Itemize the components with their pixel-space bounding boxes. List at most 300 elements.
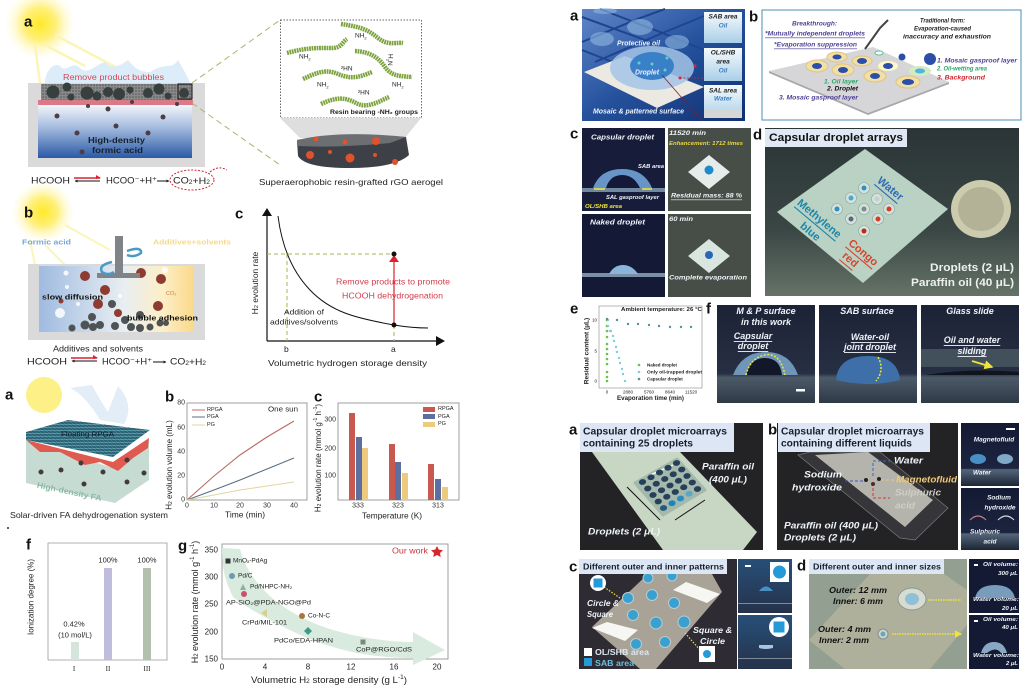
background	[580, 423, 763, 550]
amine labels: NH	[355, 32, 364, 40]
bars: PGA	[356, 437, 441, 500]
vapour plumes	[70, 385, 128, 424]
red particles	[58, 268, 166, 317]
floating RPGA top	[26, 420, 150, 457]
caption: aerogel: Superaerophobic resin-grafted rGO aerogel	[259, 177, 443, 187]
legend: PG	[438, 421, 446, 427]
title box	[580, 423, 734, 452]
label a: a	[569, 422, 578, 438]
tick labels: 60	[177, 424, 185, 432]
left legend: 2. Droplet	[826, 86, 859, 92]
series: only oil-trapped droplet	[607, 319, 626, 382]
amine labels: 2	[364, 35, 367, 40]
subpanel: magnetofluid and water	[961, 423, 1019, 486]
axis titles: -1	[190, 543, 196, 549]
subpanel: capsular droplet side view: OL/SHB area	[585, 204, 622, 210]
icon: sun	[26, 377, 62, 413]
catalyst particles	[54, 100, 179, 154]
amine labels: 2	[326, 84, 329, 89]
icon: pipette	[865, 20, 888, 49]
legend: PGA	[438, 414, 450, 420]
tick labels: 40	[177, 448, 185, 456]
tick labels: 323	[392, 502, 404, 510]
legend	[584, 647, 649, 668]
inset: resin bearing NH2 groups	[280, 20, 422, 118]
subpanel: residual mass: Enhancement: 1712 times	[669, 141, 743, 147]
axis labels: 2	[254, 305, 260, 308]
subpanel: 40 uL oil: 40 μL	[1001, 625, 1018, 631]
amine labels: NH	[299, 54, 308, 60]
subpanel: magnetofluid and water: Magnetofluid	[974, 436, 1015, 444]
subpanel: complete evaporation	[668, 214, 751, 297]
axis titles: evolution rate (mmol g	[314, 422, 322, 504]
legend: PGA	[207, 414, 219, 420]
text: sizes: Inner: 6 mm	[833, 596, 883, 606]
axis titles: 2	[317, 503, 323, 506]
catalyst particles	[38, 458, 146, 486]
tick labels: 0	[220, 662, 225, 672]
bar chart: H2 evolution rate vs temperature	[313, 388, 459, 520]
left legend	[779, 78, 859, 102]
equation b: HCOO⁻+H⁺	[102, 356, 152, 368]
tick labels: 300	[205, 572, 219, 582]
text: additives+solvents: Additives+solvents	[153, 238, 231, 246]
text: volumes: Droplets (2 μL)	[930, 262, 1014, 274]
text: pattern labels	[587, 598, 732, 646]
tick labels: 333	[352, 502, 364, 510]
legend: PG	[207, 422, 215, 428]
text: CO2: CO₂	[166, 291, 176, 297]
tick labels: 4	[263, 662, 268, 672]
subpanel: SAB surface: joint droplet	[843, 342, 897, 352]
value labels: 0.42%	[63, 620, 85, 628]
amine labels: 2	[386, 59, 391, 62]
label c: c	[569, 558, 577, 576]
icon: star our work	[431, 546, 443, 557]
axis titles	[164, 420, 265, 520]
axis titles: )	[314, 404, 322, 407]
chart title: Ambient temperature: 26 °C	[621, 307, 702, 313]
axis titles: -1	[190, 556, 196, 562]
series labels: Pd/NHPC-NH₂	[250, 584, 293, 590]
category labels	[73, 665, 151, 673]
tick labels: 8	[306, 662, 311, 672]
data markers	[226, 558, 366, 644]
white bubbles	[44, 267, 168, 318]
subpanel: sodium hydroxide and sulphuric acid	[961, 488, 1019, 550]
title box: Capsular droplet microarrays	[583, 426, 727, 438]
frame	[222, 544, 448, 659]
subpanel: 300 uL oil	[969, 559, 1019, 613]
value labels	[58, 556, 157, 640]
label c: c	[570, 126, 578, 142]
text: our work: Our work	[392, 546, 429, 556]
axis titles: Temperature (K)	[362, 512, 422, 520]
right legend	[936, 58, 1017, 82]
droplets	[832, 182, 894, 236]
dimension lines	[627, 487, 705, 520]
text: sizes: Outer: 12 mm	[829, 585, 887, 595]
inset caption: Resin bearing -NH₂ groups	[330, 110, 419, 116]
series labels: PdCo/EDA-HPAN	[274, 638, 333, 644]
text: volumes	[784, 520, 878, 544]
subpanel: square droplet	[738, 615, 792, 669]
subpanel: residual mass: 11520 min	[669, 131, 706, 137]
title box: Capsular droplet arrays	[769, 132, 903, 144]
red interface	[26, 438, 149, 471]
text: breakthrough: *Mutually independent droplets	[765, 30, 865, 38]
line: PG	[187, 482, 294, 500]
title box	[809, 559, 944, 574]
resin chains	[287, 24, 412, 105]
legend: SAB area	[595, 658, 634, 668]
equation a: HCOOH	[31, 176, 70, 186]
bars: RPGA	[349, 413, 434, 500]
amine labels: NH	[317, 82, 326, 88]
text: pattern labels: Circle	[700, 636, 725, 646]
bars: PG	[362, 448, 448, 500]
text: volumes: Droplets (2 μL)	[784, 532, 856, 544]
tick labels: 80	[177, 400, 185, 406]
text: methylene blue: Methylene	[795, 197, 843, 241]
tick labels: 200	[205, 628, 219, 636]
tile: SAB area: SAB area	[709, 14, 738, 20]
liquid labels: acid	[895, 500, 915, 512]
axis titles: evolution rate (mmol g	[190, 562, 200, 653]
tick labels: 5	[594, 348, 597, 354]
series: capsular droplet	[606, 318, 692, 328]
frame	[762, 10, 1021, 120]
axis labels: evolution rate	[250, 251, 260, 305]
subpanel: magnetofluid and water: Water	[973, 470, 991, 476]
product bubbles	[46, 82, 189, 100]
droplets	[622, 571, 690, 650]
text: volumes	[911, 262, 1014, 289]
equation a: +H	[193, 176, 206, 186]
equation b: +H	[189, 356, 203, 368]
tick labels: 300	[324, 416, 336, 424]
bars	[71, 568, 151, 660]
text: sizes: Outer: 4 mm	[818, 624, 871, 634]
title box: containing 25 droplets	[583, 438, 693, 450]
axis titles	[584, 318, 684, 402]
amine labels: ²HN	[341, 66, 353, 72]
tick labels: 200	[324, 446, 336, 452]
title box	[579, 559, 727, 574]
text: breakthrough	[765, 20, 865, 48]
leader lines	[662, 64, 704, 121]
text: floating RPGA: Floating RPGA	[61, 432, 114, 438]
right legend: 1. Mosaic gasproof layer	[937, 58, 1017, 64]
arrows	[892, 600, 961, 634]
category labels: III	[144, 665, 151, 673]
axis titles: Residual content (μL)	[584, 318, 590, 384]
arrow: remove products	[389, 255, 399, 325]
icon: sun with rays	[4, 0, 125, 83]
curve	[278, 216, 428, 328]
legend: RPGA	[438, 406, 454, 412]
plot frame	[338, 403, 459, 500]
tile grid	[582, 9, 704, 64]
text: one sun: One sun	[268, 404, 298, 414]
series labels: Pd/C	[238, 572, 253, 580]
value labels: 100%	[98, 556, 118, 564]
text: sizes	[818, 585, 887, 645]
equation a	[31, 168, 227, 190]
amine labels: N	[386, 61, 394, 66]
y-axis title: Ionization degree (%)	[26, 559, 36, 635]
glass slide	[798, 452, 948, 540]
caption: Solar-driven FA dehydrogenation system	[10, 510, 168, 520]
equation b: 2	[202, 361, 207, 367]
title box	[778, 423, 930, 452]
category labels: I	[73, 665, 76, 673]
right legend: 2. Oil-wetting area	[936, 66, 987, 72]
axis titles: evolution volume (mL)	[164, 420, 174, 501]
axis titles: -1	[313, 406, 319, 411]
axis titles: Evaporation time (min)	[617, 396, 684, 402]
subpanel: capsular droplet side view: SAL gasproof layer	[606, 195, 660, 201]
vessel	[28, 264, 205, 340]
label b: b	[749, 8, 758, 26]
text: sizes: Inner: 2 mm	[819, 635, 869, 645]
axis titles: Time (min)	[225, 510, 265, 520]
background	[777, 423, 958, 550]
tick labels: 20	[177, 472, 185, 480]
scatter chart: residual content vs evaporation time (right e)	[570, 300, 703, 402]
text: high-density formic acid	[88, 135, 145, 155]
label g: g	[178, 538, 187, 554]
amine labels: 2	[308, 56, 311, 61]
equation b	[27, 355, 207, 368]
reactor vessel	[28, 82, 205, 167]
plot frame	[187, 403, 307, 500]
scatter chart: performance comparison (g)	[178, 538, 448, 685]
text: traditional form	[903, 18, 991, 40]
legend: Only oil-trapped droplet	[647, 370, 703, 374]
tick labels: 20	[433, 662, 442, 672]
icon: sun	[11, 180, 110, 265]
slide	[592, 452, 757, 550]
text: remove product bubbles: Remove product bubbles	[63, 72, 164, 82]
small droplet	[878, 629, 888, 639]
series labels: CoP@RGO/CdS	[356, 646, 413, 654]
label b: b	[768, 422, 777, 438]
text: traditional form: Traditional form:	[920, 18, 965, 24]
series: naked droplet	[606, 319, 608, 382]
panel: microarrays with 25 droplets (lower a)	[569, 422, 763, 550]
axis titles	[313, 404, 422, 520]
text: remove products: Remove products to promote	[336, 278, 451, 286]
tile: SAB area	[704, 12, 742, 43]
subpanel: glass slide: Glass slide	[946, 306, 994, 316]
liquid labels: Magnetofluid	[896, 474, 957, 486]
tick labels: 16	[390, 662, 399, 672]
subpanel: 300 uL oil: Water volume:	[973, 597, 1019, 603]
text: pattern labels: Circle &	[587, 598, 619, 608]
subpanel: 300 uL oil: 300 μL	[998, 571, 1018, 577]
value labels: 100%	[137, 556, 157, 564]
large droplet	[898, 588, 926, 610]
axis labels	[250, 251, 428, 368]
legend	[638, 362, 703, 382]
title box: Different outer and inner sizes	[813, 562, 941, 572]
equation b: HCOOH	[27, 356, 67, 368]
label b: b	[165, 388, 174, 406]
text: bubble adhesion: bubble adhesion	[127, 314, 198, 322]
subpanel: glass slide	[921, 305, 1019, 403]
icon: square with circle	[685, 633, 715, 662]
chart: trade-off curve (c)	[235, 206, 451, 368]
background	[809, 559, 967, 669]
tick labels: 8640	[665, 390, 676, 394]
subpanel: residual mass: Residual mass: 88 %	[671, 192, 742, 200]
axis titles: Volumetric H	[251, 675, 302, 685]
left legend: 3. Mosaic gasproof layer	[779, 94, 858, 102]
title box: Different outer and inner patterns	[583, 562, 724, 572]
subpanel: circle droplet	[738, 559, 792, 613]
background	[582, 9, 745, 121]
tick labels	[324, 416, 444, 510]
subpanel: residual mass	[668, 128, 751, 211]
panel: additive-based system (b)	[11, 180, 231, 368]
text: remove products	[336, 278, 451, 300]
subpanel: 300 uL oil: Oil volume:	[983, 562, 1018, 568]
amine labels: NH	[392, 82, 401, 88]
subpanel: M&P surface: M & P surface	[736, 306, 796, 316]
subpanel: M&P surface: droplet	[738, 341, 769, 351]
subpanel: naked droplet side view: Naked droplet	[590, 218, 646, 226]
subpanel: sodium hydroxide and sulphuric acid: Sulphuric	[970, 528, 1000, 536]
equation a: CO	[173, 176, 187, 186]
text: traditional form: Evaporation-caused	[914, 26, 972, 32]
equation b: CO	[170, 356, 184, 368]
text: addition of additives: Addition of	[284, 308, 325, 316]
tick labels	[592, 318, 698, 394]
plate	[809, 574, 967, 669]
amine labels: H	[386, 54, 394, 59]
equation a: HCOO⁻+H⁺	[106, 176, 157, 186]
text: volumes: Paraffin oil (400 μL)	[784, 520, 878, 532]
subpanel: M&P surface: in this work	[741, 317, 792, 327]
legend	[192, 407, 223, 428]
subpanel: glass slide: sliding	[958, 346, 987, 356]
title box: containing different liquids	[781, 438, 912, 450]
label d: d	[797, 558, 806, 574]
amine labels: ²HN	[358, 90, 370, 96]
tick labels: 20	[236, 502, 244, 510]
axis titles: -1	[313, 417, 319, 422]
text: droplet: Droplet	[635, 68, 659, 76]
axis titles: H	[314, 506, 322, 512]
text: high-density formic acid: High-density	[88, 135, 145, 145]
tick labels: 0	[181, 496, 185, 504]
axis titles: )	[404, 675, 407, 685]
droplets and leaders	[845, 461, 895, 498]
label a: a	[24, 14, 33, 30]
text: methylene blue: blue	[797, 220, 823, 244]
subpanel: SAB surface: Water-oil	[851, 332, 890, 342]
subpanel: SAB surface	[819, 305, 917, 403]
text: water: Water	[875, 175, 906, 204]
axis titles: H	[190, 657, 200, 663]
tile: OL/SHB area: Oil	[719, 68, 728, 74]
text: protective oil: Protective oil	[617, 38, 661, 48]
tick labels: 313	[432, 502, 444, 510]
subpanel: capsular droplet side view: SAB area	[638, 164, 664, 170]
stirrer	[97, 236, 141, 278]
legend: Naked droplet	[647, 362, 678, 368]
label f: f	[26, 536, 32, 554]
legend: OL/SHB area	[595, 647, 649, 657]
line: PGA	[187, 458, 294, 500]
white surface	[584, 56, 704, 108]
tile: SAL area	[704, 85, 742, 118]
amine labels: 2	[401, 84, 404, 89]
subpanel: naked droplet side view	[582, 214, 665, 297]
icon: circle with square	[590, 575, 620, 598]
label b: b	[24, 204, 33, 222]
subpanel: complete evaporation: Complete evaporation	[669, 274, 747, 282]
tick labels: 10	[210, 502, 218, 510]
text: paraffin oil	[702, 462, 754, 486]
rGO aerogel block	[297, 134, 409, 168]
text: volumes: Paraffin oil (40 μL)	[911, 277, 1014, 289]
panel: capsular droplet arrays (right d)	[753, 126, 1019, 296]
subpanel: 40 uL oil	[969, 615, 1019, 669]
label a: a	[570, 8, 579, 24]
icon: blue vapour flames	[45, 60, 190, 83]
tick labels: 11520	[685, 390, 698, 394]
axis titles: h	[190, 549, 200, 557]
panel: different outer and inner sizes (lower d)	[797, 558, 1019, 669]
liquid block	[26, 440, 149, 503]
gray plate	[769, 47, 949, 115]
tick labels: 10	[592, 318, 597, 322]
subpanel: capsular droplet side view	[582, 128, 665, 211]
subpanel: 40 uL oil: 2 μL	[1005, 661, 1018, 667]
tile: SAL area: SAL area	[709, 88, 737, 94]
series labels: Co-N-C	[308, 612, 330, 620]
tick labels: 350	[205, 546, 219, 554]
panel: mosaic and patterned surface (right a)	[570, 8, 745, 121]
liquid labels: Water	[894, 456, 924, 466]
legend: Capsular droplet	[647, 376, 683, 382]
title box	[765, 129, 907, 147]
line chart: H2 evolution volume	[164, 388, 307, 520]
axis labels: Volumetric hydrogen storage density	[268, 358, 428, 368]
liquid labels: Sodium	[804, 470, 843, 480]
tick labels: 0	[185, 502, 189, 510]
tick labels: 40	[290, 502, 298, 510]
subpanel: capsular droplet side view: Capsular droplet	[591, 132, 655, 142]
tick labels: 0	[606, 390, 609, 394]
data points	[392, 252, 396, 328]
amine labels	[299, 32, 404, 96]
tile: OL/SHB area: area	[716, 58, 730, 66]
axis labels: a	[391, 344, 396, 354]
droplets	[806, 51, 936, 88]
tick labels: 100	[324, 472, 336, 480]
axis titles: H	[164, 504, 174, 510]
subpanel: glass slide: Oil and water	[944, 335, 1001, 345]
axis titles: 2	[306, 679, 311, 685]
axis titles: 2	[194, 653, 200, 657]
text: remove products: HCOOH dehydrogenation	[342, 292, 443, 300]
left legend: 1. Oil layer	[824, 78, 858, 86]
legend: RPGA	[207, 407, 223, 413]
slide	[777, 149, 948, 283]
